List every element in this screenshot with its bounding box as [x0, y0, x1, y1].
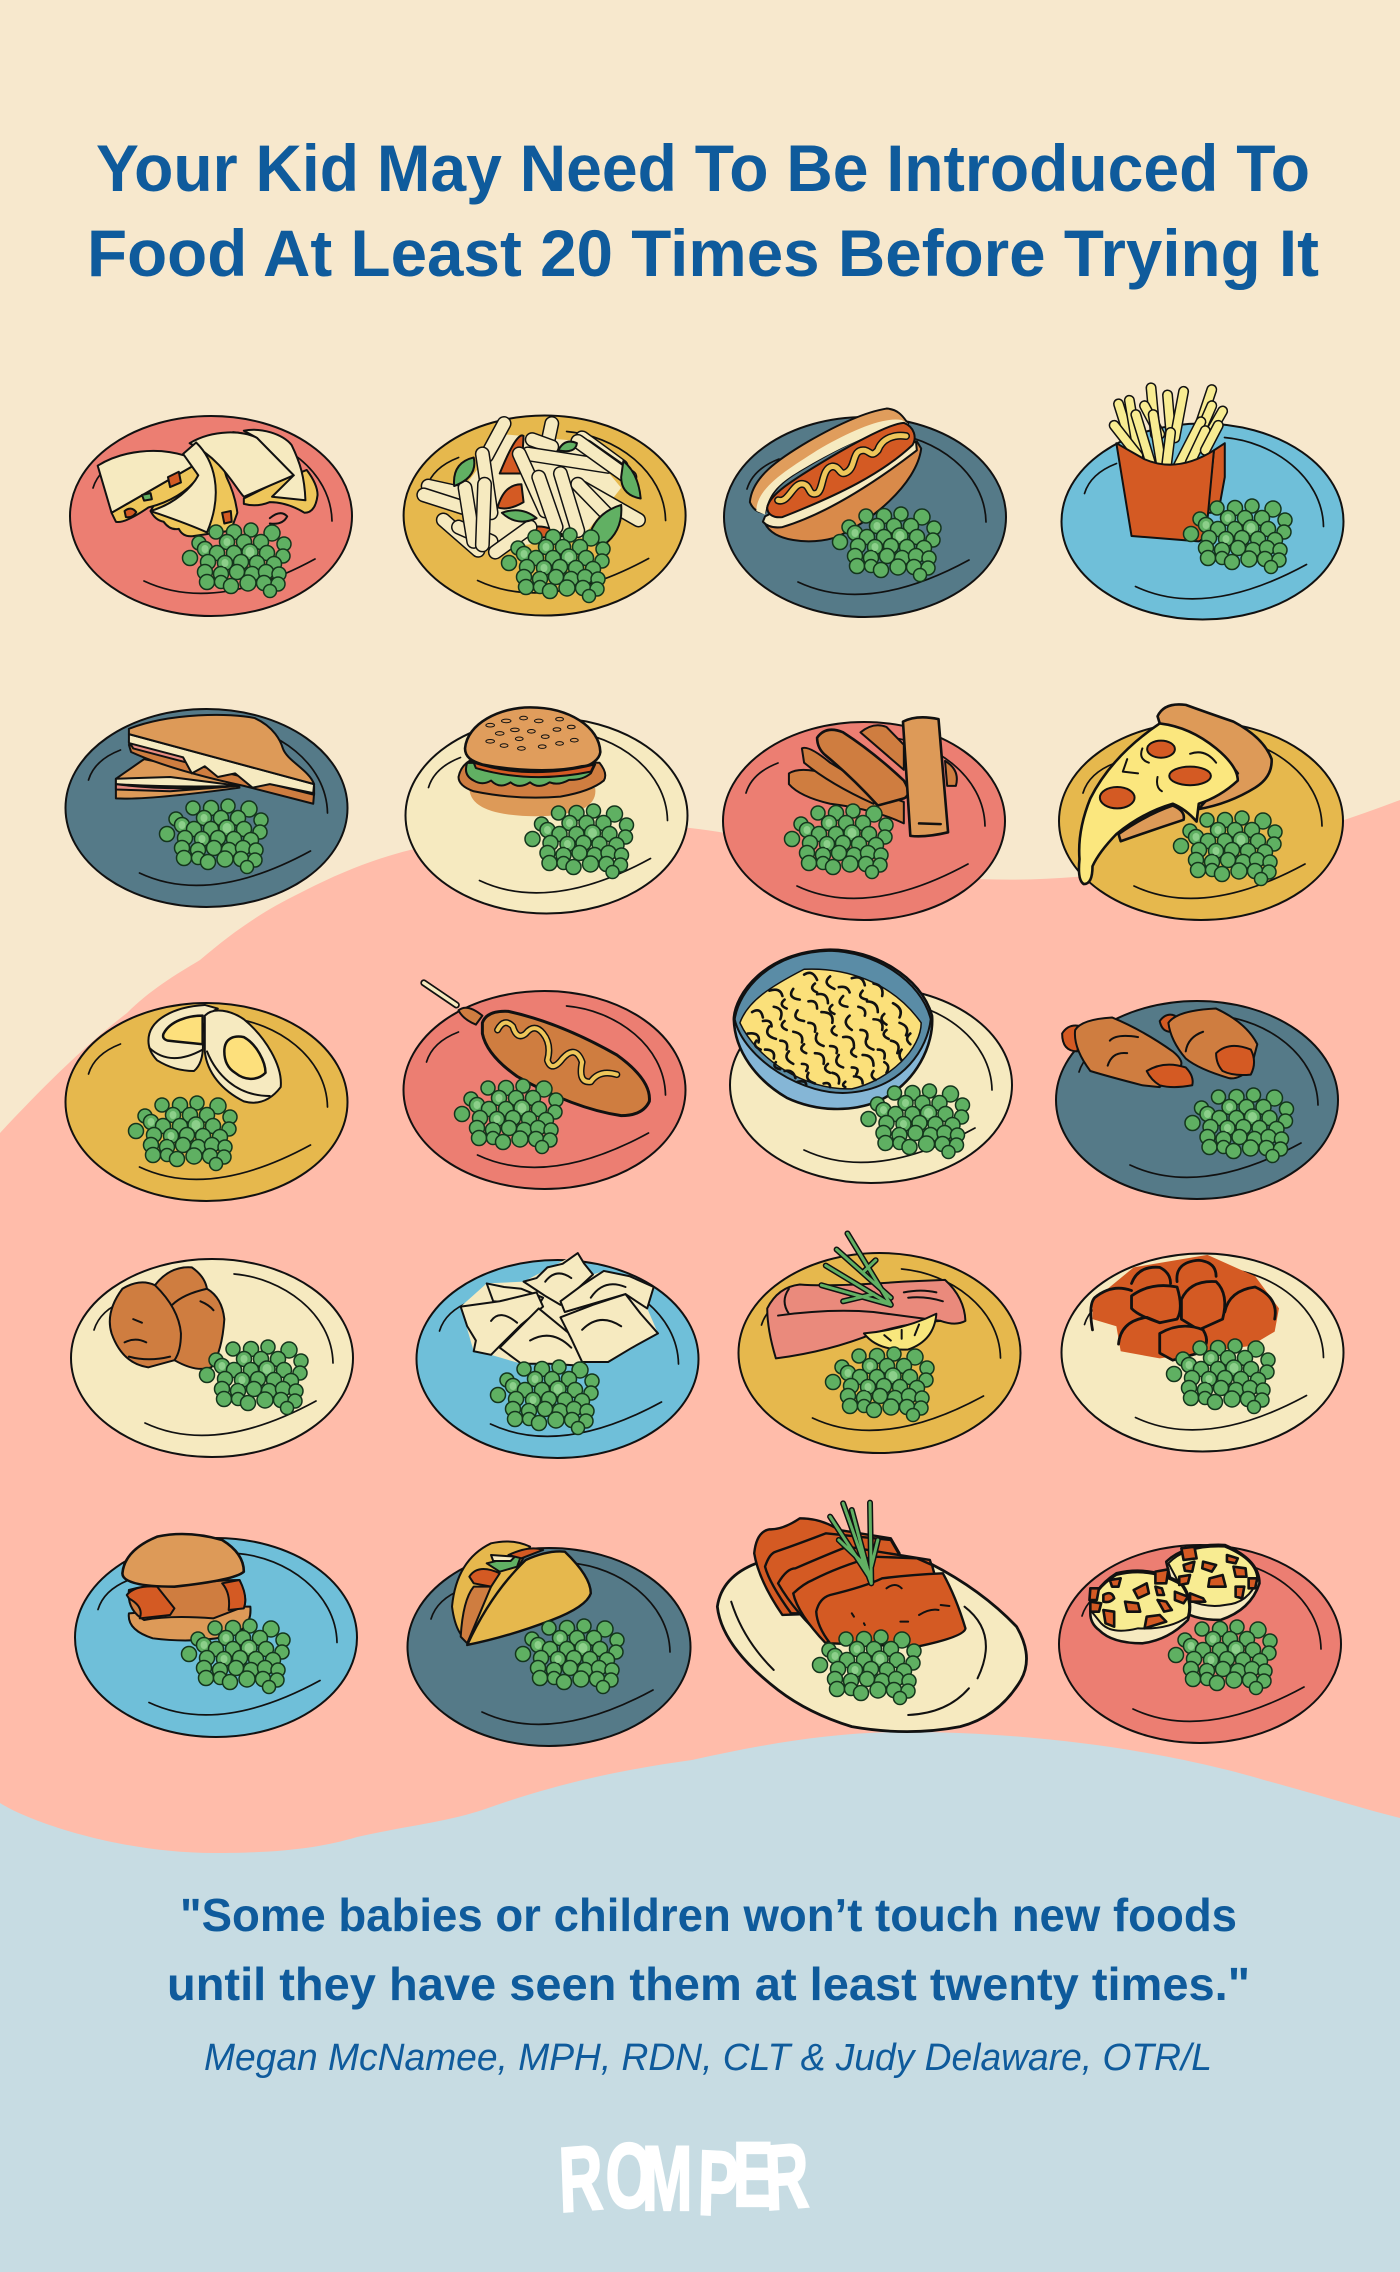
title: Food At Least 20 Times Before Trying It — [87, 216, 1319, 290]
plate: mac and cheese bowl — [730, 950, 1012, 1183]
logo: Romper: ROMPER — [557, 2122, 810, 2236]
plate: salmon with lemon and rosemary — [738, 1233, 1020, 1453]
title — [87, 131, 1319, 290]
plate: sloppy joe — [75, 1534, 357, 1737]
plate: burger — [406, 707, 688, 914]
plate: french fries — [1062, 388, 1344, 620]
plate: pigs in a blanket — [1056, 1001, 1338, 1199]
background wave: pink — [0, 800, 1400, 2272]
attribution: Megan McNamee, MPH, RDN, CLT & Judy Delaware, OTR/L — [204, 2037, 1212, 2079]
plate: corn dog — [404, 983, 686, 1189]
title: Your Kid May Need To Be Introduced To — [96, 131, 1310, 205]
plate: hot dog — [724, 409, 1006, 617]
background wave: light blue — [0, 1732, 1400, 2272]
plate: quesadilla — [70, 416, 352, 616]
plate: fish sticks — [723, 717, 1005, 920]
plate: pasta — [404, 416, 686, 616]
plate: ravioli — [416, 1253, 698, 1458]
plate: meatloaf on platter — [717, 1503, 1027, 1732]
plate: boiled eggs — [66, 1003, 348, 1201]
plate: loaded potato skins — [1059, 1545, 1341, 1743]
plate: pizza — [1059, 704, 1343, 920]
plate: taco — [408, 1541, 690, 1746]
platter — [717, 1563, 1027, 1732]
quote: until they have seen them at least twenty times." — [167, 1958, 1250, 2010]
plate: grilled sandwich — [66, 709, 348, 907]
quote — [167, 1889, 1250, 2010]
plate: chicken — [71, 1259, 353, 1457]
quote: "Some babies or children won’t touch new foods — [180, 1889, 1237, 1941]
plate: chicken nuggets — [1062, 1254, 1344, 1452]
